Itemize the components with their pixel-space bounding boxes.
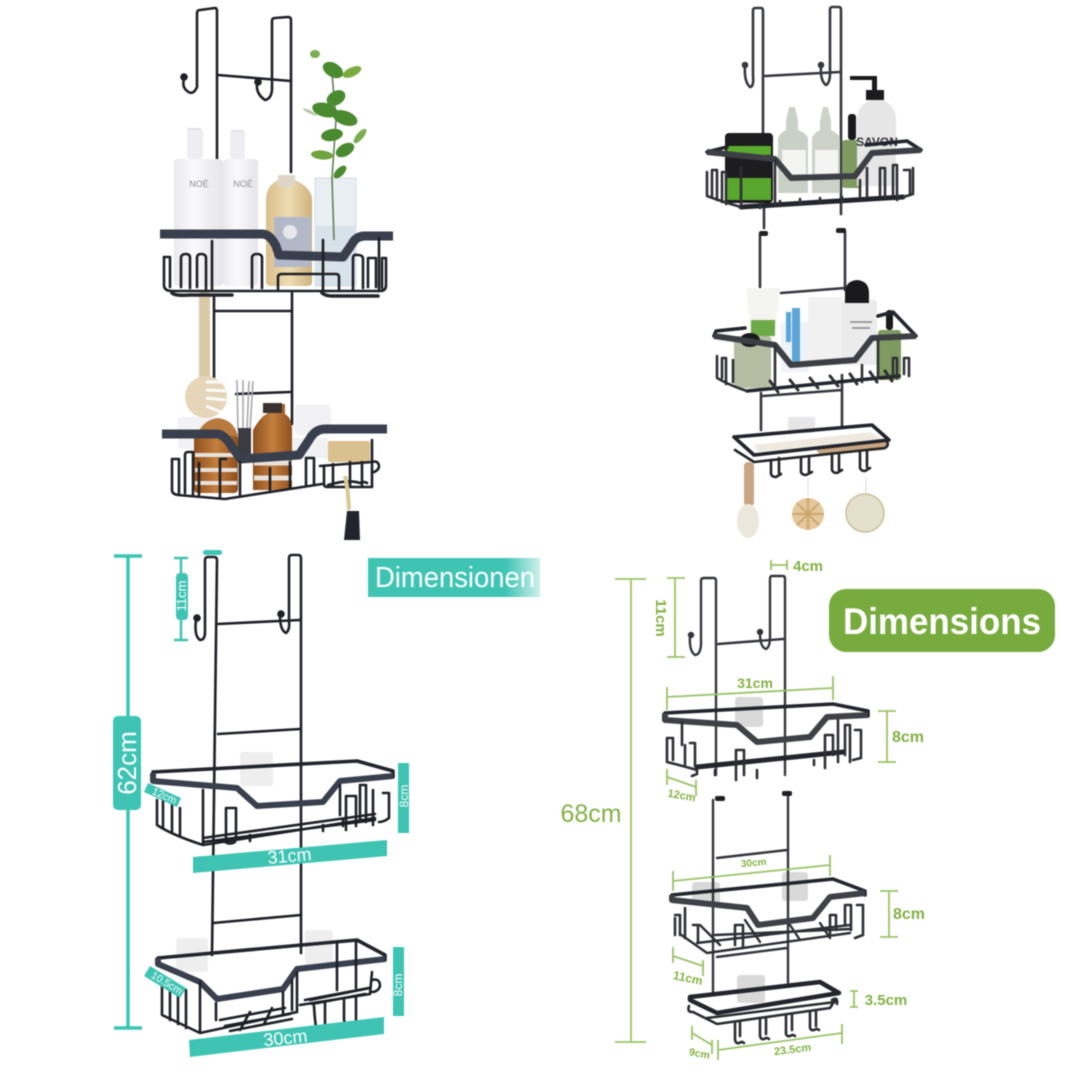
dimension: hook 11cm: 11cm [174,581,189,611]
dimension: lower 8cm [880,891,925,937]
dimension: lower 8cm bar: 8cm [391,974,405,996]
dimension: height 68cm [560,579,646,1042]
middle basket [672,879,865,953]
lower basket [158,940,385,1034]
dimension: lower 8cm: 8cm [893,906,925,923]
hanging bath accessories [737,462,884,538]
dimension: lower 8cm bar [391,947,405,1016]
dimension: 23.5cm [718,1024,842,1060]
dimension: 4cm [771,558,823,575]
heading: Dimensionen: Dimensionen [375,562,535,594]
products on upper shelf: NOÉ [189,179,209,189]
products on middle shelf [734,280,901,388]
upper basket [160,234,393,296]
dimension: upper 8cm bar [397,763,411,833]
dimension: 30cm bar [189,1017,384,1057]
dimension: upper 8cm [878,711,924,762]
adhesive pads [176,752,333,972]
dimension: 11cm depth: 11cm [672,968,704,988]
bath brush [185,291,228,418]
frame [689,576,788,993]
upper basket [707,141,921,208]
dimension: 4cm tag [203,550,222,555]
products on top shelf [725,76,898,203]
middle basket [714,312,916,392]
dimension: 30cm [673,855,830,891]
dimension: 23.5cm: 23.5cm [773,1042,812,1058]
upper basket [665,704,868,780]
frame [743,7,845,430]
icon: potted plant [302,50,368,240]
dimension: 12cm [667,769,697,804]
dimension: 10.5cm tag: 10.5cm [149,969,185,998]
dimension: 12cm: 12cm [667,788,697,804]
dimension: 12cm tag: 12cm [150,786,179,807]
dimension: 31cm bar: 31cm [267,844,312,868]
dimension: height 62cm [112,556,142,1028]
dimension: 3.5cm: 3.5cm [865,992,907,1009]
dimension: 9cm: 9cm [688,1046,711,1062]
hanging brush handle [344,476,360,540]
products on upper shelf: NOÉ [233,179,253,189]
dimension: hook 11cm: 11cm [652,599,669,637]
dimension: 30cm bar: 30cm [262,1026,308,1050]
lower basket [162,429,387,499]
dimension: upper 8cm: 8cm [892,729,924,746]
dimension: 12cm tag [144,783,181,807]
bottom soap dish [734,417,889,477]
heading: Dimensions: Dimensions [843,601,1041,642]
panel: English dimensions diagram (bottom right) [560,558,1055,1062]
adhesive pads [692,697,808,1003]
heading: Dimensions [829,589,1055,652]
upper basket [153,761,393,845]
products on top shelf: SAVON [856,135,898,149]
dimension: 11cm depth [672,947,704,988]
dimension: 9cm [688,1026,712,1062]
dimension: 31cm bar [193,840,387,873]
dimension: height 68cm: 68cm [560,800,622,828]
frame [194,555,301,955]
panel: two-tier caddy with toiletries (top left) [160,8,393,540]
frame [182,8,292,424]
dimension: height 62cm: 62cm [112,731,142,795]
panel: three-tier caddy with toiletries (top right) [707,7,921,538]
products on lower shelf [178,380,370,493]
connector clips [715,791,792,801]
products on upper shelf [174,129,356,286]
dimension: hook 11cm [652,578,685,657]
dimension: hook 11cm [174,558,189,640]
dimension: 4cm: 4cm [793,558,823,575]
connector clips [759,228,846,236]
dimension: 31cm: 31cm [737,675,773,691]
dimension: upper 8cm bar: 8cm [397,785,411,807]
bottom soap dish [688,982,839,1043]
panel: German dimensions diagram (bottom left) [112,550,540,1057]
dimension: 30cm: 30cm [741,857,767,870]
dimension: 31cm [667,675,833,710]
